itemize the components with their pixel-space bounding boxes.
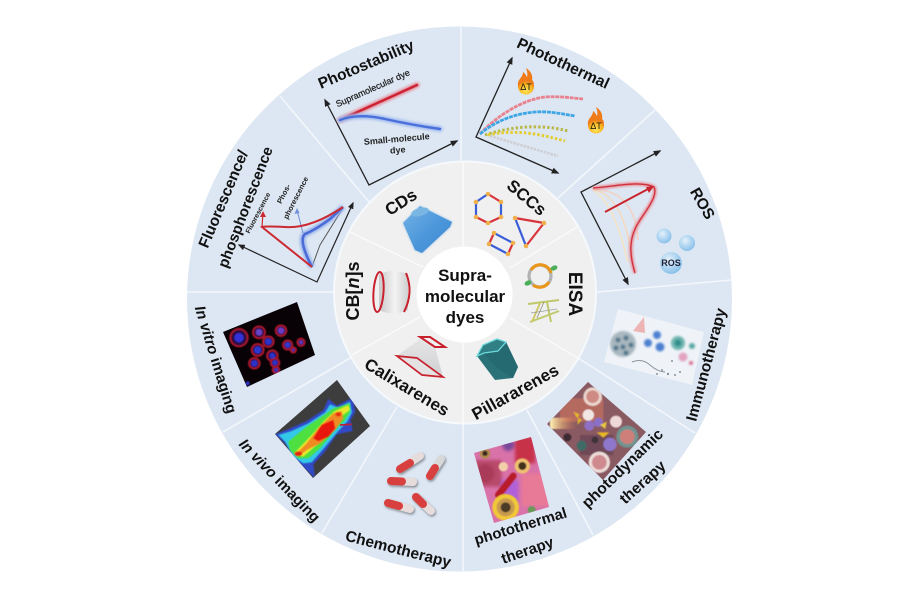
chart: heating curves: [476, 58, 583, 173]
label: EISA: EISA: [564, 272, 585, 316]
chart: photostability curves: [325, 67, 457, 185]
heading: in vitro imaging: In vitro imaging: [191, 304, 240, 416]
label: Pillararenes: Pillararenes: [469, 361, 562, 424]
centre circle with title: molecular: [425, 287, 506, 306]
centre circle with title: [416, 246, 512, 342]
infographic wheel: [187, 26, 732, 572]
heading: chemotherapy: Chemotherapy: [343, 528, 453, 572]
icon: EISA ring: [524, 264, 558, 287]
label: Calixarenes: Calixarenes: [361, 355, 453, 420]
chart: emission spectra: Fluorescence: [245, 192, 272, 235]
icon: EISA fibre lattice: [528, 300, 559, 322]
heading: photothermal: Photothermal: [514, 35, 612, 93]
panel: in vivo imaging: [238, 380, 370, 524]
chart: emission spectra: Phos-: [275, 182, 293, 205]
chart: ROS curves: [581, 151, 660, 284]
image: in vivo heat map: [275, 380, 370, 478]
image: photodynamic therapy: [547, 382, 646, 480]
centre circle with title: dyes: [446, 308, 484, 327]
panel: chemotherapy: [343, 456, 453, 572]
heading: fluorescence/phosphorescence: Fluorescence/: [196, 147, 252, 251]
chart: emission spectra: phorescence: [281, 175, 310, 221]
heading: in vivo imaging: In vivo imaging: [235, 436, 323, 526]
icon: cucurbituril barrel: [372, 271, 410, 314]
chart: photostability curves: Supramolecular dye: [334, 67, 411, 109]
heading: photodynamic therapy: photodynamic: [579, 426, 667, 512]
outer ring background: [187, 26, 732, 572]
icon: calixarene frustum: [397, 337, 445, 377]
panel: photothermal therapy: [474, 437, 567, 564]
icon: pills: [388, 456, 442, 512]
panel: ROS: [581, 151, 718, 284]
icon: flame delta T right: ΔT: [590, 121, 602, 131]
panel: photodynamic therapy: [547, 382, 666, 510]
panel: immunotherapy: [600, 305, 730, 423]
heading: ROS: ROS: [686, 185, 718, 223]
image: in vitro cell microscopy: [223, 302, 315, 387]
panel: in vitro imaging: [194, 302, 315, 414]
panel: photostability: [316, 37, 457, 185]
heading: fluorescence/phosphorescence: phosphorescence: [215, 144, 277, 270]
label: SCCs: SCCs: [503, 176, 550, 220]
icon: flame delta T left: ΔT: [520, 82, 532, 92]
image: immunotherapy illustration: [604, 309, 704, 385]
label: CDs: CDs: [382, 185, 420, 220]
chart: photostability curves: Small-molecule: [363, 131, 430, 147]
heading: photostability: Photostability: [316, 37, 417, 93]
icon: ROS spheres: ROS: [661, 258, 681, 268]
panel: fluorescence / phosphorescence: [196, 144, 353, 282]
heading: photothermal therapy: therapy: [499, 534, 557, 568]
chart: emission spectra: [239, 175, 353, 282]
label: CB[n]s: CB[n]s: [343, 261, 363, 321]
icon: SCC polygons: [474, 192, 546, 256]
inner ring background: [334, 162, 596, 424]
heading: photodynamic therapy: therapy: [616, 457, 670, 508]
image: photothermal therapy: [474, 437, 549, 523]
panel: photothermal: [476, 35, 612, 173]
chart: photostability curves: dye: [390, 144, 406, 156]
heading: immunotherapy: Immunotherapy: [683, 306, 730, 423]
centre circle with title: Supra-: [438, 266, 492, 285]
icon: pillararene prism: [477, 339, 518, 380]
heading: photothermal therapy: photothermal: [472, 505, 569, 549]
icon: CDs cone: [403, 206, 452, 253]
